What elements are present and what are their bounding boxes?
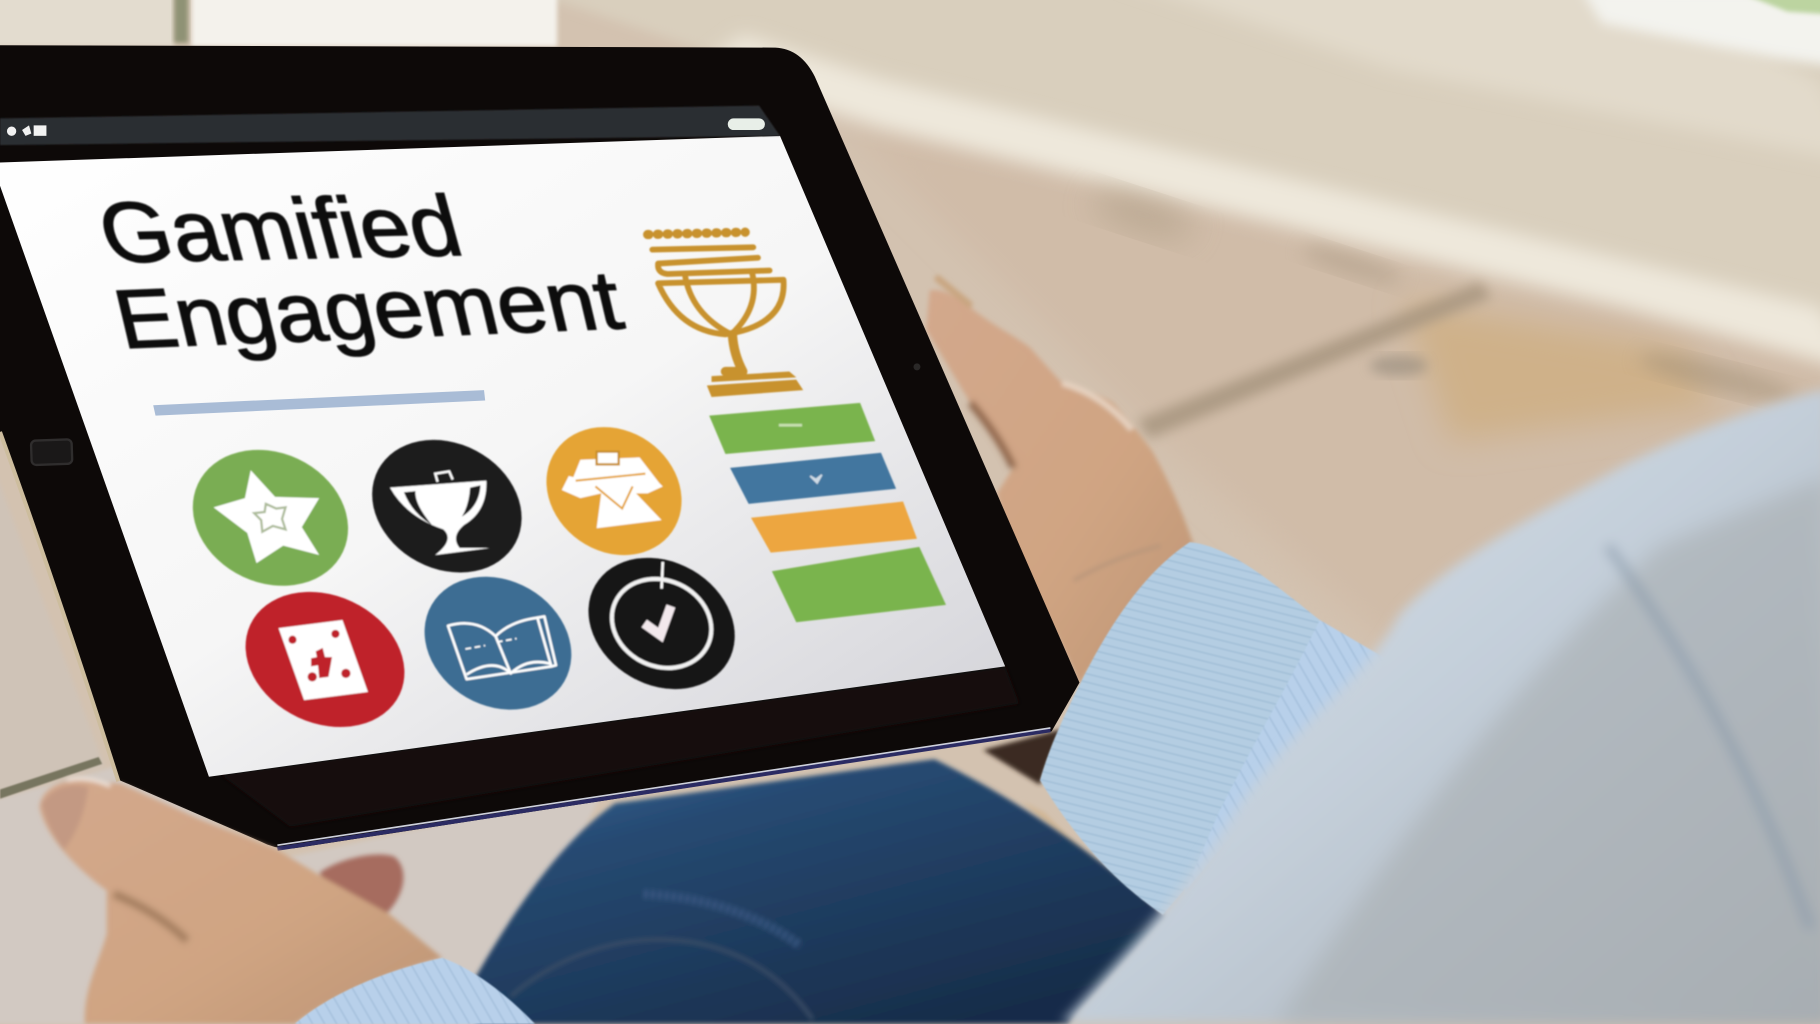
camera <box>913 363 920 370</box>
top-left window frame <box>0 0 174 46</box>
browser icons <box>7 125 46 136</box>
left sleeve cuff <box>295 958 535 1024</box>
index finger behind <box>319 854 403 915</box>
browser bar <box>0 106 780 145</box>
tablet bottom edge highlight <box>277 728 1050 849</box>
thumb and palm <box>39 780 442 1024</box>
gold trophy <box>648 232 803 397</box>
sleeve ruffle <box>1184 620 1387 894</box>
tablet lower bezel tone <box>221 666 1019 827</box>
tablet body <box>0 45 1079 848</box>
tablet <box>0 45 1079 849</box>
left floor <box>0 453 104 795</box>
floor plank line <box>1138 282 1492 439</box>
bright sill band <box>696 35 1820 372</box>
bar 3 orange <box>751 502 917 553</box>
heading: Engagement <box>105 253 631 366</box>
left hand <box>39 779 442 1024</box>
shoulder in shirt, foreground <box>1062 389 1820 1024</box>
shadow under tablet corner <box>983 729 1062 785</box>
right sleeve cuff <box>1040 542 1387 915</box>
right hand behind tablet <box>926 279 1193 685</box>
tablet side button <box>31 439 72 465</box>
jeans <box>470 759 1167 1024</box>
badge: black trophy <box>349 414 545 598</box>
colored bars <box>709 403 946 622</box>
bar 4 green <box>772 547 946 622</box>
browser button <box>728 118 765 130</box>
heading: Gamified <box>88 178 472 281</box>
badge: blue book <box>400 551 596 736</box>
badge: orange garment <box>521 401 707 581</box>
heading underline <box>153 390 485 416</box>
tablet silver edge <box>0 432 118 781</box>
tablet screen <box>0 136 1005 777</box>
badge: check <box>565 532 759 715</box>
heading <box>88 178 631 366</box>
badge: red map <box>223 567 427 752</box>
bar 2 blue <box>730 453 896 504</box>
badge: star <box>170 425 371 611</box>
bar 1 green <box>709 403 875 454</box>
